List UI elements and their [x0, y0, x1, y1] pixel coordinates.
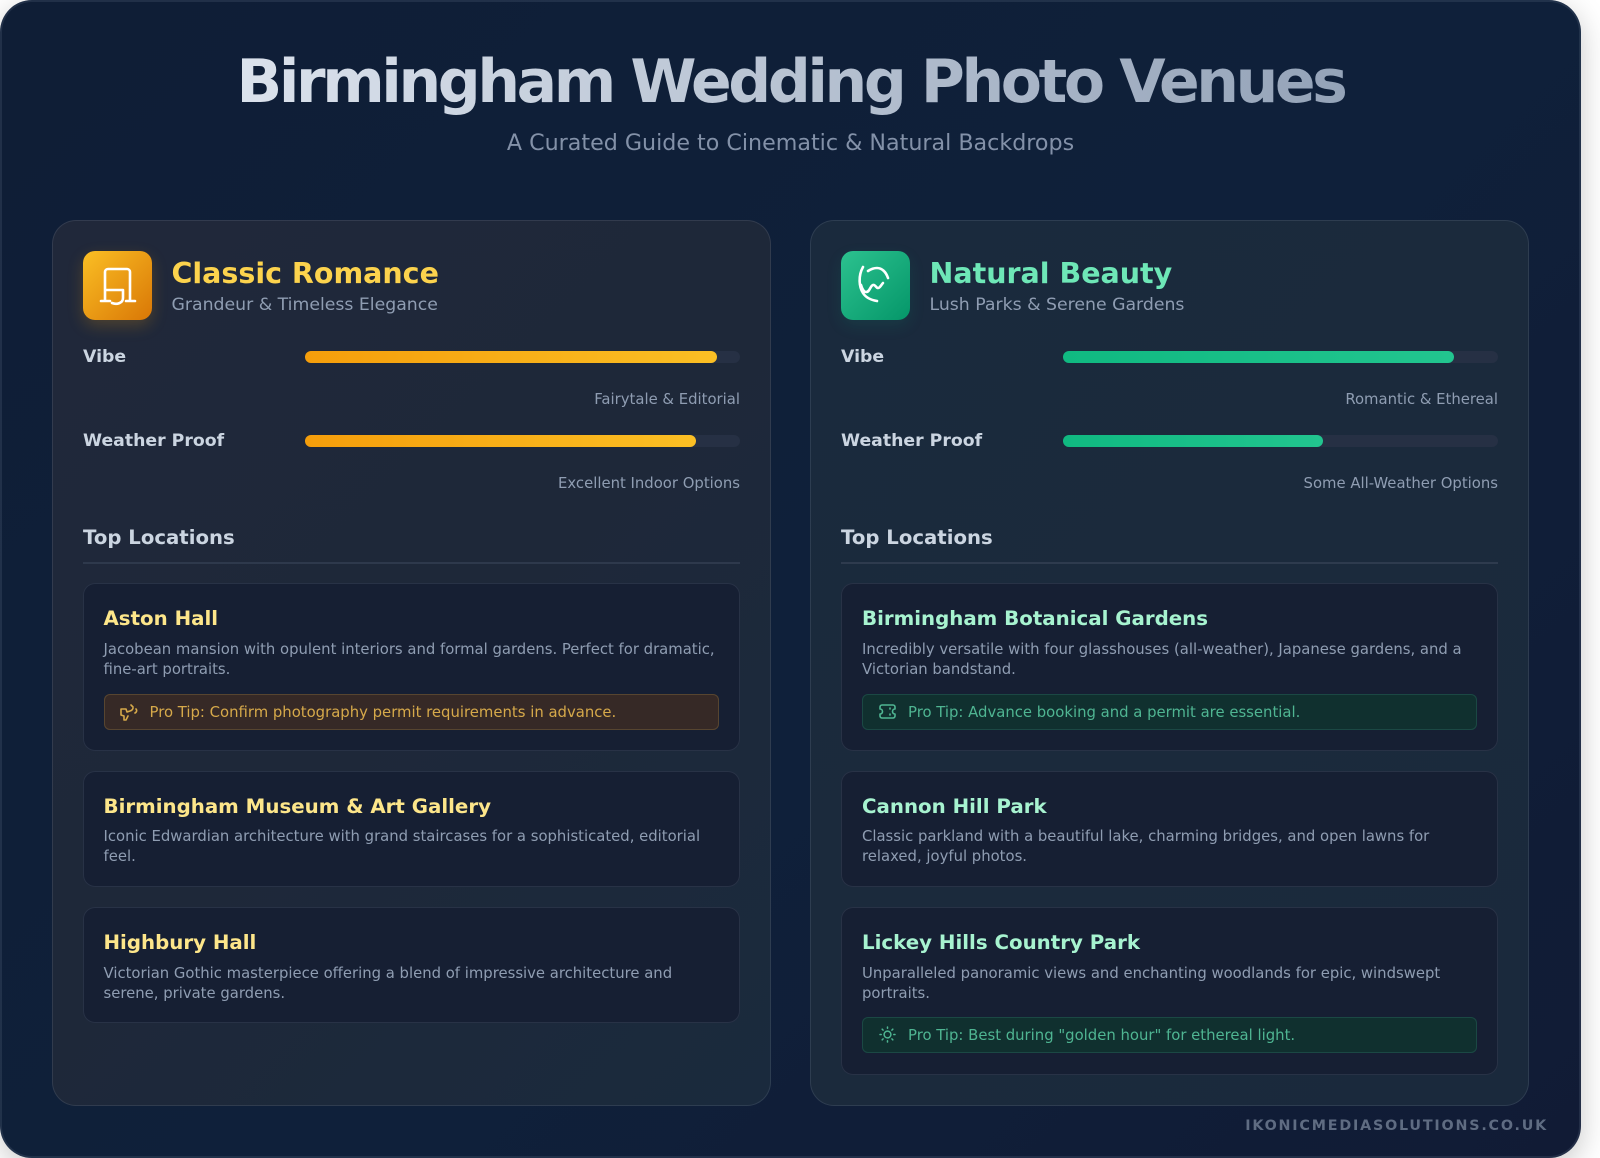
description: portraits. — [862, 984, 930, 1002]
description: Jacobean mansion with opulent interiors and formal gardens. Perfect for dramatic, — [104, 640, 715, 658]
value: vibe: Fairytale & Editorial — [594, 390, 740, 408]
title — [0, 43, 1581, 121]
value: weather proof: Some All-Weather Options — [1304, 474, 1498, 492]
description — [102, 640, 715, 678]
label: weather proof: Weather Proof — [841, 431, 982, 451]
footer watermark: IKONICMEDIASOLUTIONS.CO.UK — [1245, 1118, 1548, 1134]
name: Aston Hall — [104, 607, 218, 630]
location: highbury hall — [83, 907, 740, 1023]
subheading: Grandeur & Timeless Elegance — [172, 295, 438, 315]
pro tip — [862, 694, 1477, 730]
location: botanical gardens — [841, 583, 1498, 751]
pro tip — [862, 1017, 1477, 1053]
location: cannon hill park — [841, 771, 1498, 887]
tip text: Pro Tip: Confirm photography permit requirements in advance. — [150, 703, 616, 721]
bar: vibe — [1063, 351, 1498, 363]
bar: vibe — [305, 351, 740, 363]
icon: sun — [879, 1026, 896, 1043]
subtitle: A Curated Guide to Cinematic & Natural Backdrops — [507, 130, 1074, 156]
heading: classic romance: Classic Romance — [172, 256, 439, 290]
name: Highbury Hall — [104, 931, 256, 954]
description: fine-art portraits. — [104, 660, 230, 678]
title: Birmingham Wedding Photo Venues — [236, 47, 1344, 117]
location: aston hall — [83, 583, 740, 751]
icon: hand — [120, 704, 138, 721]
name: Birmingham Botanical Gardens — [862, 607, 1208, 630]
description: Unparalleled panoramic views and enchanting woodlands for epic, windswept — [862, 964, 1440, 982]
panel: classic romance — [52, 220, 771, 1106]
description: Victorian Gothic masterpiece offering a blend of impressive architecture and — [104, 964, 672, 982]
value: weather proof: Excellent Indoor Options — [558, 474, 740, 492]
description: Victorian bandstand. — [862, 660, 1016, 678]
label: vibe: Vibe — [841, 347, 884, 367]
heading: natural beauty: Natural Beauty — [930, 256, 1172, 290]
description — [862, 640, 1462, 678]
location: museum — [83, 771, 740, 887]
description: Iconic Edwardian architecture with grand staircases for a sophisticated, editorial — [104, 828, 700, 845]
icon: ticket — [879, 704, 896, 719]
name: Lickey Hills Country Park — [862, 931, 1140, 954]
description — [862, 964, 1440, 1002]
description: serene, private gardens. — [104, 984, 285, 1002]
description: Classic parkland with a beautiful lake, charming bridges, and open lawns for — [862, 828, 1429, 845]
location: lickey hills — [841, 907, 1498, 1075]
tip text: Pro Tip: Best during "golden hour" for ethereal light. — [908, 1026, 1295, 1044]
tip text: Pro Tip: Advance booking and a permit are essential. — [908, 703, 1300, 721]
name: Cannon Hill Park — [862, 795, 1047, 818]
icon: natural beauty — [841, 251, 910, 320]
value: vibe: Romantic & Ethereal — [1345, 390, 1498, 408]
description: relaxed, joyful photos. — [862, 848, 1027, 865]
label: vibe: Vibe — [83, 347, 126, 367]
subheading: Lush Parks & Serene Gardens — [930, 295, 1184, 315]
description: Incredibly versatile with four glasshouses (all-weather), Japanese gardens, and a — [862, 640, 1462, 658]
heading: top locations: Top Locations — [83, 526, 235, 548]
panel: natural beauty — [810, 220, 1529, 1106]
bar: weather proof — [1063, 435, 1498, 447]
description — [862, 828, 1430, 865]
bar: weather proof — [305, 435, 740, 447]
pro tip — [104, 694, 718, 730]
label: weather proof: Weather Proof — [83, 431, 224, 451]
icon: classic romance — [83, 251, 152, 320]
description — [104, 964, 672, 1002]
description: feel. — [104, 848, 136, 865]
heading: top locations: Top Locations — [841, 526, 993, 548]
description — [104, 828, 700, 865]
name: Birmingham Museum & Art Gallery — [104, 795, 491, 818]
